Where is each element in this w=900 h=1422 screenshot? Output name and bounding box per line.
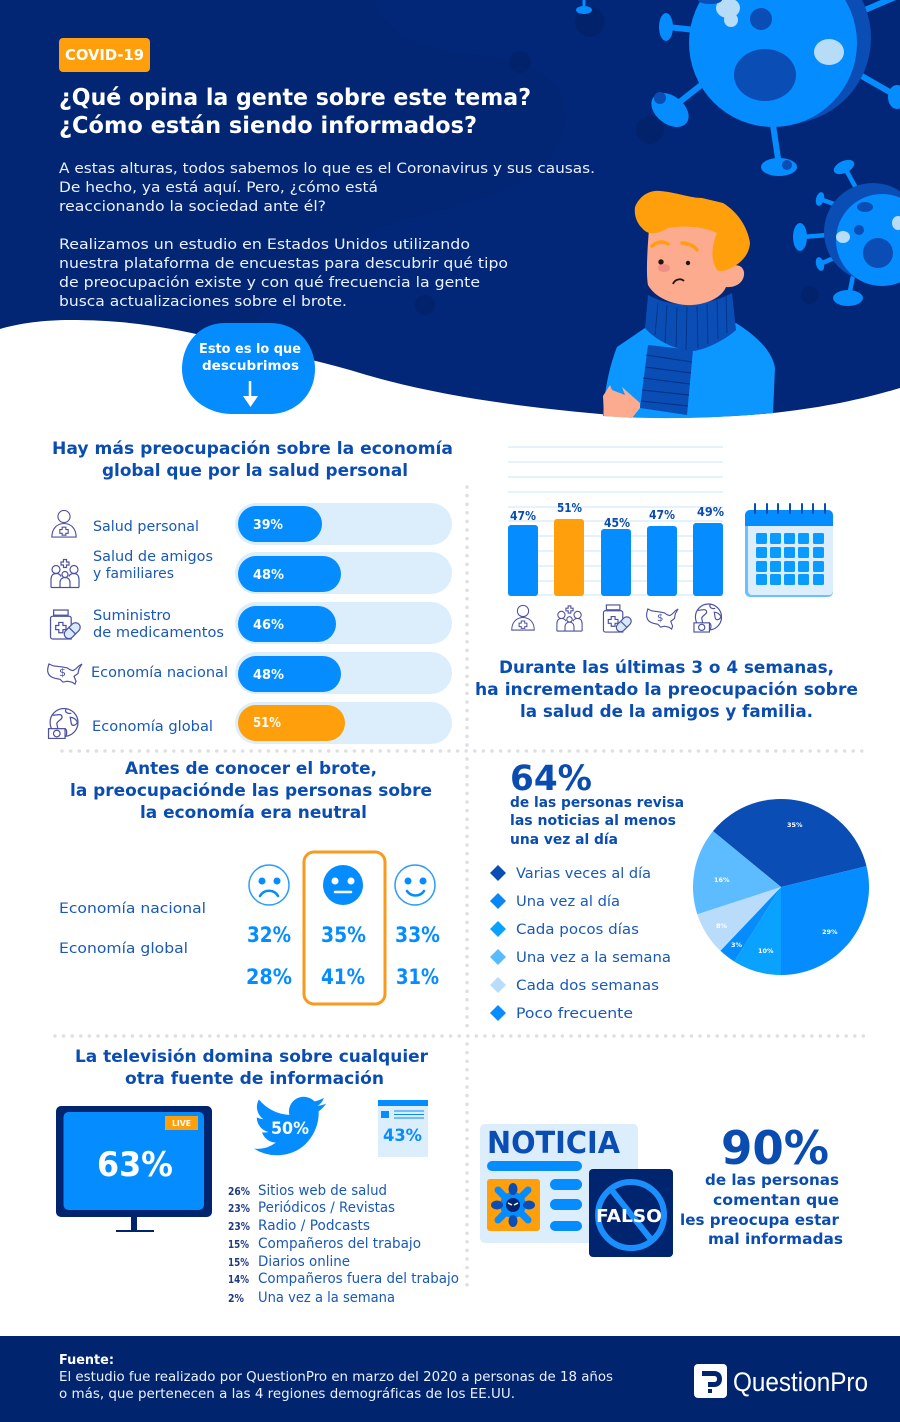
source note: o más, que pertenecen a las 4 regiones demográficas de los EE.UU.	[59, 1387, 515, 1402]
header background	[0, 0, 900, 430]
table: sentimiento sobre la economía: 28%	[246, 965, 292, 989]
legend: frecuencia: Varias veces al día	[516, 866, 651, 882]
dotted dividers	[55, 487, 866, 1292]
icon: television 63%	[56, 1106, 212, 1232]
heading: antes de conocer el brote: la economía era neutral	[140, 803, 367, 823]
heading: antes de conocer el brote: la preocupaciónde las personas sobre	[70, 781, 432, 801]
bar row: salud de amigos y familiares: y familiares	[93, 566, 174, 582]
intro text	[59, 161, 595, 310]
badge: COVID-19	[59, 38, 150, 72]
heading: durante las últimas semanas	[475, 658, 858, 722]
bar row: suministro de medicamentos: 46%	[253, 617, 284, 633]
list: otras fuentes de información: 26%	[228, 1186, 250, 1198]
legend: frecuencia: Cada pocos días	[516, 922, 639, 938]
stat: 90%: mal informadas	[708, 1230, 843, 1248]
pie chart: frecuencia de revisión: 35%	[787, 821, 803, 829]
bar row: economía global: Economía global	[92, 719, 213, 735]
table: sentimiento sobre la economía: Economía nacional	[59, 901, 206, 917]
list: otras fuentes de información: Diarios online	[258, 1254, 350, 1270]
intro text: reaccionando la sociedad ante él?	[59, 199, 326, 215]
intro text: de preocupación existe y con qué frecuencia la gente	[59, 275, 480, 291]
list: otras fuentes de información: 15%	[228, 1257, 249, 1269]
list: otras fuentes de información: Una vez a la semana	[258, 1290, 395, 1306]
logo: QuestionPro: QuestionPro	[733, 1367, 868, 1397]
list: otras fuentes de información: 23%	[228, 1203, 250, 1215]
legend: frecuencia: Cada dos semanas	[516, 978, 659, 994]
bar row: salud de amigos y familiares: Salud de amigos	[93, 549, 213, 565]
heading: antes de conocer el brote	[70, 759, 432, 823]
bar row: suministro de medicamentos: Suministro	[93, 608, 171, 624]
bar row: economía nacional: 48%	[253, 667, 284, 683]
bar row: salud de amigos y familiares	[51, 549, 452, 594]
heading: durante las últimas semanas: la salud de la amigos y familia.	[520, 702, 813, 722]
title: ¿Qué opina la gente sobre este tema?	[59, 85, 531, 111]
illustration: noticia falsa: NOTICIA	[487, 1126, 621, 1161]
logo: QuestionPro	[694, 1364, 868, 1398]
source note: Fuente:	[59, 1353, 114, 1368]
column chart: incremento de preocupación: 49%	[697, 504, 724, 519]
icon: sad face	[249, 865, 289, 905]
icon: virus on news card	[491, 1183, 535, 1227]
legend: frecuencia: Una vez al día	[516, 894, 620, 910]
heading: la televisión domina	[75, 1047, 429, 1089]
icon: television 63%: 63%	[97, 1145, 173, 1185]
bar row: salud personal: 39%	[253, 517, 283, 533]
list: otras fuentes de información: Periódicos / Revistas	[258, 1200, 395, 1216]
table: sentimiento sobre la economía: 33%	[395, 923, 440, 947]
illustration: worried man with scarf	[603, 191, 775, 418]
pie chart: frecuencia de revisión: 10%	[758, 947, 774, 955]
illustration: noticia falsa	[480, 1124, 673, 1257]
list: otras fuentes de información: 23%	[228, 1221, 250, 1233]
stat: 64%: 64%	[510, 759, 592, 799]
callout: esto es lo que descubrimos	[182, 323, 315, 414]
bar row: economía nacional	[48, 652, 452, 694]
table: sentimiento sobre la economía: 32%	[247, 923, 291, 947]
stat: 64%	[510, 759, 684, 848]
stat: 90%: de las personas	[705, 1171, 839, 1189]
stat: 90%: comentan que	[713, 1191, 839, 1209]
bar row: suministro de medicamentos: de medicamentos	[93, 625, 224, 641]
heading: la televisión domina: otra fuente de información	[125, 1069, 384, 1089]
icon: television 63%: LIVE	[172, 1119, 191, 1128]
source note	[59, 1353, 613, 1402]
highlight box: neutral	[304, 852, 385, 1004]
icon: webpage 43%	[378, 1100, 428, 1157]
list: otras fuentes de información: 2%	[228, 1293, 244, 1305]
list: otras fuentes de información: Sitios web de salud	[258, 1183, 387, 1199]
illustration: noticia falsa: FALSO	[596, 1206, 662, 1227]
list: otras fuentes de información: Radio / Podcasts	[258, 1218, 370, 1234]
stat: 64%: las noticias al menos	[510, 813, 676, 829]
legend: frecuencia: Poco frecuente	[516, 1006, 633, 1022]
column chart: incremento de preocupación: 47%	[649, 507, 675, 522]
heading: economía global: Hay más preocupación sobre la economía	[52, 439, 453, 459]
callout: esto es lo que descubrimos: Esto es lo que	[199, 341, 301, 357]
bar row: salud de amigos y familiares: 48%	[253, 567, 284, 583]
heading: economía global	[52, 439, 453, 481]
bar row: economía nacional: $	[59, 666, 66, 679]
stat: 90%	[680, 1121, 843, 1248]
pie chart: frecuencia de revisión: 16%	[714, 876, 730, 884]
intro text: busca actualizaciones sobre el brote.	[59, 294, 347, 310]
title: ¿Cómo están siendo informados?	[59, 113, 477, 139]
table: sentimiento sobre la economía: 41%	[321, 965, 365, 989]
icon: neutral face	[323, 865, 363, 905]
callout: esto es lo que descubrimos: descubrimos	[202, 358, 299, 374]
icon: webpage 43%: 43%	[383, 1126, 422, 1145]
legend: frecuencia	[490, 865, 671, 1022]
list: otras fuentes de información: Compañeros del trabajo	[258, 1236, 421, 1252]
pie chart: frecuencia de revisión	[693, 799, 869, 975]
badge: COVID-19: COVID-19	[65, 46, 144, 64]
intro text: De hecho, ya está aquí. Pero, ¿cómo está	[59, 180, 378, 196]
heading: la televisión domina: La televisión domina sobre cualquier	[75, 1047, 429, 1067]
list: otras fuentes de información: Compañeros fuera del trabajo	[258, 1271, 459, 1287]
intro text: Realizamos un estudio en Estados Unidos utilizando	[59, 237, 470, 253]
icon: small virus	[793, 157, 900, 306]
column chart: incremento de preocupación: $	[657, 613, 663, 624]
heading: economía global: global que por la salud personal	[102, 461, 408, 481]
intro text: nuestra plataforma de encuestas para descubrir qué tipo	[59, 256, 508, 272]
column chart: incremento de preocupación	[508, 447, 724, 634]
icon: happy face	[395, 865, 435, 905]
bar row: salud personal	[52, 503, 452, 545]
intro text: A estas alturas, todos sabemos lo que es el Coronavirus y sus causas.	[59, 161, 595, 177]
bar row: salud personal: Salud personal	[93, 519, 199, 535]
icon: large virus	[576, 0, 900, 176]
bar row: economía global: 51%	[253, 715, 281, 731]
icon: calendar	[745, 504, 833, 597]
bar row: suministro de medicamentos	[51, 602, 452, 644]
list: otras fuentes de información	[228, 1183, 459, 1306]
bar row: economía global	[49, 702, 452, 744]
stat: 90%: 90%	[721, 1121, 829, 1175]
icon: twitter 50%	[254, 1097, 326, 1155]
list: otras fuentes de información: 15%	[228, 1239, 249, 1251]
legend: frecuencia: Una vez a la semana	[516, 950, 671, 966]
heading: durante las últimas semanas: Durante las últimas 3 o 4 semanas,	[499, 658, 834, 678]
stat: 64%: una vez al día	[510, 832, 618, 848]
icon: twitter 50%: 50%	[271, 1119, 309, 1139]
pie chart: frecuencia de revisión: 29%	[822, 928, 838, 936]
title	[59, 85, 531, 139]
table: sentimiento sobre la economía	[59, 852, 440, 1004]
bar row: economía nacional: Economía nacional	[91, 665, 228, 681]
table: sentimiento sobre la economía: 35%	[321, 923, 366, 947]
stat: 64%: de las personas revisa	[510, 795, 684, 811]
footer	[0, 1336, 900, 1422]
source note: El estudio fue realizado por QuestionPro en marzo del 2020 a personas de 18 años	[59, 1370, 613, 1385]
list: otras fuentes de información: 14%	[228, 1274, 249, 1286]
heading: durante las últimas semanas: ha incrementado la preocupación sobre	[475, 680, 858, 700]
heading: antes de conocer el brote: Antes de conocer el brote,	[125, 759, 377, 779]
stat: 90%: les preocupa estar	[680, 1211, 840, 1229]
table: sentimiento sobre la economía: 31%	[396, 965, 439, 989]
pie chart: frecuencia de revisión: 3%	[731, 941, 743, 949]
column chart: incremento de preocupación: 45%	[604, 515, 630, 530]
table: sentimiento sobre la economía: Economía global	[59, 941, 188, 957]
pie chart: frecuencia de revisión: 8%	[716, 922, 728, 930]
column chart: incremento de preocupación: 47%	[510, 508, 536, 523]
column chart: incremento de preocupación: 51%	[557, 500, 582, 515]
